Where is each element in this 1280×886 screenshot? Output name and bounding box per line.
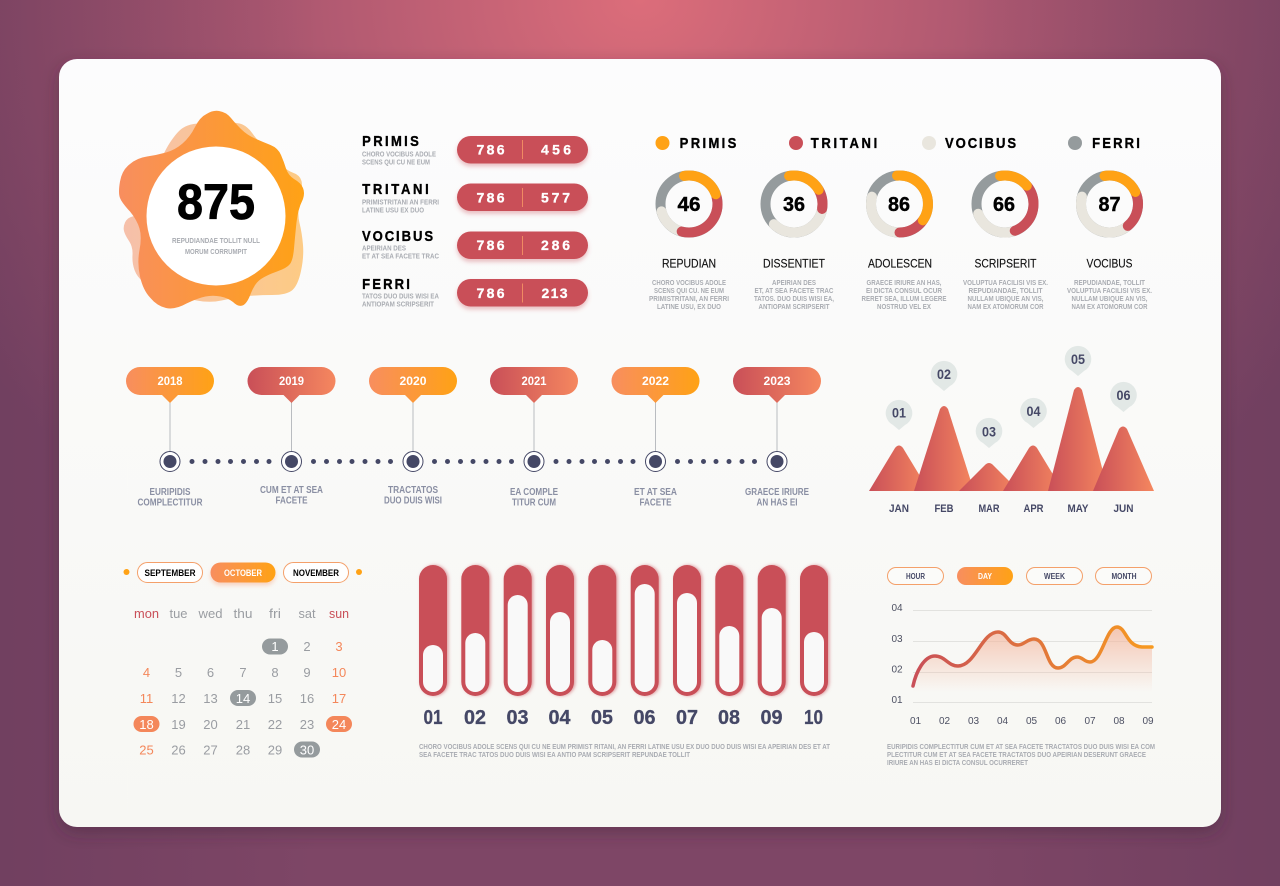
date grid: 26 bbox=[171, 742, 186, 758]
x axis labels: 01 bbox=[910, 716, 921, 727]
donut 46: 46 bbox=[678, 194, 700, 216]
weekday headers: thu bbox=[234, 606, 252, 621]
date grid: 8 bbox=[271, 665, 279, 680]
dashboard card bbox=[59, 59, 1221, 827]
legend: PRIMIS bbox=[680, 135, 736, 151]
stat: ferri: FERRI bbox=[362, 276, 410, 292]
stat: vocibus bbox=[362, 228, 588, 260]
bubble 03 bbox=[976, 418, 1002, 448]
peak feb bbox=[914, 406, 974, 491]
donut captions bbox=[649, 256, 1152, 311]
milestone 2023 bbox=[733, 367, 821, 508]
x axis labels: 02 bbox=[939, 716, 950, 727]
big number: 875 bbox=[177, 174, 255, 230]
area fill bbox=[913, 627, 1152, 692]
weekday headers: mon bbox=[134, 606, 159, 621]
stat: ferri bbox=[362, 276, 588, 308]
range tabs: MONTH bbox=[1112, 572, 1137, 581]
caption: dissentiet: DISSENTIET bbox=[763, 256, 826, 270]
line chart caption: IRIURE AN HAS EI DICTA CONSUL OCURRERET bbox=[887, 760, 1029, 767]
peak apr bbox=[1003, 446, 1063, 491]
milestone 2021: EA COMPLE bbox=[510, 487, 558, 498]
month tabs bbox=[124, 562, 362, 582]
blob back layer bbox=[124, 122, 303, 302]
bar chart caption: SEA FACETE TRAC TATOS DUO DUIS WISI EA ANTIO PAM SCRIPSERIT REPUNDAE TOLLIT bbox=[419, 752, 691, 759]
milestone 2020 bbox=[369, 367, 457, 506]
milestone 2019 bbox=[248, 367, 336, 506]
stat: primis: 786 bbox=[476, 142, 505, 158]
white circle bbox=[146, 146, 286, 286]
caption: scripserit: VOLUPTUA FACILISI VIS EX. bbox=[963, 280, 1048, 287]
x axis labels bbox=[910, 716, 1154, 727]
date grid: 18 bbox=[139, 717, 154, 732]
donut 86 bbox=[860, 164, 939, 244]
bubble 02: 02 bbox=[937, 367, 951, 382]
milestone 2022: ET AT SEA bbox=[634, 487, 677, 498]
capsule 03 bbox=[504, 565, 532, 729]
caption: repudian: SCENS QUI CU. NE EUM bbox=[654, 288, 724, 295]
grid lines bbox=[913, 610, 1152, 702]
donut 87 bbox=[1069, 164, 1150, 244]
caption: scripserit: NULLAM UBIQUE AN VIS, bbox=[968, 296, 1044, 303]
date grid: 5 bbox=[175, 665, 182, 680]
date grid: 28 bbox=[236, 742, 250, 758]
date grid: 24 bbox=[332, 717, 346, 732]
panel: timeline bbox=[126, 367, 821, 508]
caption: dissentiet: ANTIOPAM SCRIPSERIT bbox=[758, 304, 830, 311]
caption: scripserit: SCRIPSERIT bbox=[974, 256, 1037, 270]
capsule 01 bbox=[419, 565, 447, 729]
date grid: 11 bbox=[140, 691, 153, 706]
milestone 2023: 2023 bbox=[764, 374, 791, 388]
bubble 04 bbox=[1020, 398, 1047, 428]
caption: vocibus: NAM EX ATOMORUM COR bbox=[1072, 304, 1148, 311]
date grid: 21 bbox=[236, 717, 250, 732]
date grid: 15 bbox=[268, 691, 282, 706]
milestone 2018: EURIPIDIS bbox=[150, 487, 191, 498]
month labels: JUN bbox=[1114, 503, 1134, 515]
donut 36: 36 bbox=[783, 194, 805, 216]
bubble 01: 01 bbox=[892, 406, 906, 420]
date grid: 13 bbox=[203, 691, 218, 706]
date grid: 7 bbox=[239, 665, 247, 680]
caption: adolescen: EI DICTA CONSUL OCUR bbox=[866, 288, 942, 295]
month labels: MAR bbox=[978, 503, 1000, 515]
trend line bbox=[913, 627, 1152, 686]
stat: primis bbox=[362, 133, 588, 166]
panel: line chart bbox=[887, 567, 1155, 767]
caption: vocibus: VOLUPTUA FACILISI VIS EX. bbox=[1067, 288, 1152, 295]
capsule 08 bbox=[715, 565, 743, 729]
milestone 2020: DUO DUIS WISI bbox=[384, 496, 442, 506]
caption: dissentiet: TATOS. DUO DUIS WISI EA, bbox=[754, 296, 834, 303]
bubble 06 bbox=[1110, 382, 1137, 412]
date grid: 3 bbox=[335, 639, 343, 654]
milestone 2022: FACETE bbox=[640, 498, 672, 508]
date grid: 2 bbox=[303, 639, 311, 654]
capsule 06: 06 bbox=[634, 706, 656, 729]
stat: vocibus: 786 bbox=[476, 237, 505, 253]
milestone 2023: GRAECE IRIURE bbox=[745, 487, 809, 498]
weekday headers: fri bbox=[269, 606, 281, 621]
caption: repudian: CHORO VOCIBUS ADOLE bbox=[652, 280, 726, 287]
bubble 02 bbox=[931, 361, 957, 391]
stat: ferri: ANTIOPAM SCRIPSERIT bbox=[362, 302, 435, 308]
stat: tritani: 786 bbox=[476, 190, 505, 206]
range tabs bbox=[888, 567, 1152, 585]
stat: tritani: TRITANI bbox=[362, 181, 429, 197]
capsule 05 bbox=[588, 565, 616, 729]
caption: adolescen: GRAECE IRIURE AN HAS, bbox=[866, 280, 942, 287]
stat: tritani bbox=[362, 181, 588, 214]
donut 36 bbox=[755, 165, 833, 243]
x axis labels: 03 bbox=[968, 716, 979, 727]
stat: ferri: 786 bbox=[476, 285, 505, 301]
milestone 2023: AN HAS EI bbox=[756, 498, 798, 508]
bubble 05 bbox=[1065, 346, 1091, 376]
donut 66 bbox=[965, 164, 1045, 244]
milestone 2018 bbox=[126, 367, 214, 508]
milestone 2019: FACETE bbox=[276, 496, 308, 506]
capsule 10: 10 bbox=[804, 706, 823, 729]
bubble 04: 04 bbox=[1026, 404, 1041, 419]
milestone 2018: COMPLECTITUR bbox=[138, 498, 203, 508]
range tabs: DAY bbox=[978, 572, 993, 581]
date grid: 17 bbox=[332, 691, 346, 706]
line chart caption bbox=[887, 744, 1155, 767]
x axis labels: 09 bbox=[1142, 716, 1154, 727]
capsule 01: 01 bbox=[424, 706, 442, 729]
capsule 10 bbox=[800, 565, 828, 729]
line chart caption: EURIPIDIS COMPLECTITUR CUM ET AT SEA FACETE TRACTATOS DUO DUIS WISI EA COM bbox=[887, 744, 1155, 751]
milestone 2019: 2019 bbox=[279, 374, 304, 388]
bubble 01 bbox=[886, 400, 912, 430]
milestone 2022 bbox=[612, 367, 700, 508]
donut 66: 66 bbox=[993, 194, 1015, 216]
stat: primis: PRIMIS bbox=[362, 133, 419, 149]
date grid: 30 bbox=[300, 742, 314, 758]
capsule 09: 09 bbox=[760, 706, 782, 729]
caption: repudian: PRIMISTRITANI, AN FERRI bbox=[649, 296, 729, 303]
stat: vocibus: APEIRIAN DES bbox=[362, 246, 406, 252]
bubble 06: 06 bbox=[1116, 388, 1131, 403]
month labels: FEB bbox=[934, 503, 954, 515]
weekday headers: sun bbox=[329, 606, 349, 621]
stat: primis: CHORO VOCIBUS ADOLE bbox=[362, 152, 436, 158]
caption: adolescen: RERET SEA, ILLUM LEGERE bbox=[862, 296, 947, 303]
donut 46 bbox=[654, 169, 724, 239]
milestone 2020: 2020 bbox=[400, 374, 427, 388]
caption: repudian: LATINE USU, EX DUO bbox=[657, 304, 721, 311]
panel: capsule bar chart bbox=[419, 565, 831, 759]
capsule 05: 05 bbox=[591, 706, 613, 729]
legend: TRITANI bbox=[811, 135, 877, 151]
capsule 02 bbox=[461, 565, 489, 729]
caption: MORUM CORRUMPIT bbox=[185, 249, 248, 256]
capsule 08: 08 bbox=[718, 706, 740, 729]
stat: tritani: LATINE USU EX DUO bbox=[362, 208, 424, 214]
weekday headers: sat bbox=[298, 606, 316, 621]
weekday headers bbox=[134, 606, 349, 621]
x axis labels: 04 bbox=[997, 716, 1008, 727]
stat: tritani: PRIMISTRITANI AN FERRI bbox=[362, 200, 439, 206]
milestone 2021: 2021 bbox=[522, 374, 547, 388]
blob front layer bbox=[119, 111, 304, 308]
month tabs: NOVEMBER bbox=[293, 568, 339, 578]
milestone 2021 bbox=[490, 367, 578, 508]
month labels bbox=[889, 503, 1134, 515]
month tabs: OCTOBER bbox=[224, 568, 262, 578]
stat: vocibus: ET AT SEA FACETE TRAC bbox=[362, 254, 439, 260]
caption: scripserit bbox=[963, 256, 1048, 311]
y axis labels: 02 bbox=[891, 664, 903, 676]
capsule 03: 03 bbox=[506, 706, 528, 729]
stat: ferri: 213 bbox=[542, 285, 568, 301]
caption: dissentiet: ET, AT SEA FACETE TRAC bbox=[754, 288, 834, 295]
x axis labels: 07 bbox=[1084, 716, 1096, 727]
panel: mountain chart bbox=[869, 346, 1154, 515]
capsule 07: 07 bbox=[676, 706, 698, 729]
date grid: 6 bbox=[207, 665, 214, 680]
donut 87: 87 bbox=[1098, 194, 1120, 216]
range tabs: HOUR bbox=[906, 572, 925, 581]
bar chart caption: CHORO VOCIBUS ADOLE SCENS QUI CU NE EUM PRIMIST RITANI, AN FERRI LATINE USU EX DUO DUO DUIS WISI EA APEIRIAN DES ET AT bbox=[419, 744, 831, 751]
date grid: 10 bbox=[332, 665, 346, 680]
x axis labels: 06 bbox=[1055, 716, 1066, 727]
caption: vocibus bbox=[1067, 256, 1152, 311]
peak mar bbox=[959, 463, 1019, 491]
milestone 2020: TRACTATOS bbox=[388, 485, 438, 496]
capsule 06 bbox=[631, 565, 659, 729]
caption: dissentiet bbox=[754, 256, 834, 311]
y axis labels: 04 bbox=[891, 603, 903, 614]
caption: dissentiet: APEIRIAN DES bbox=[772, 280, 816, 287]
stat: tritani: 577 bbox=[541, 190, 570, 206]
caption: repudian bbox=[649, 256, 729, 311]
timeline dots bbox=[190, 459, 757, 464]
panel: calendar bbox=[124, 562, 362, 758]
panel: donut charts bbox=[654, 164, 1150, 244]
caption: repudian: REPUDIAN bbox=[662, 256, 716, 270]
weekday headers: tue bbox=[170, 606, 188, 621]
date grid: 4 bbox=[143, 665, 150, 680]
month labels: JAN bbox=[889, 503, 909, 515]
legend bbox=[656, 135, 1140, 151]
caption: scripserit: REPUDIANDAE, TOLLIT bbox=[968, 288, 1043, 295]
caption: adolescen bbox=[862, 256, 947, 311]
peak jun bbox=[1093, 426, 1154, 491]
date grid: 23 bbox=[300, 717, 314, 732]
stat: ferri: TATOS DUO DUIS WISI EA bbox=[362, 294, 439, 300]
peak may bbox=[1048, 387, 1108, 491]
milestone 2021: TITUR CUM bbox=[512, 498, 556, 508]
month tabs: SEPTEMBER bbox=[144, 568, 196, 578]
date grid: 20 bbox=[203, 717, 218, 732]
capsule 07 bbox=[673, 565, 701, 729]
capsule 02: 02 bbox=[464, 706, 486, 729]
panel: blob score bbox=[119, 111, 304, 308]
milestone 2019: CUM ET AT SEA bbox=[260, 485, 323, 496]
weekday headers: wed bbox=[197, 606, 222, 621]
x axis labels: 05 bbox=[1026, 716, 1037, 727]
capsule 04: 04 bbox=[548, 706, 571, 729]
stat: vocibus: 286 bbox=[541, 237, 570, 253]
stat: primis: 456 bbox=[541, 142, 571, 158]
date grid: 16 bbox=[300, 691, 314, 706]
y axis labels bbox=[891, 603, 903, 706]
panel: category stats bbox=[362, 133, 588, 308]
month labels: MAY bbox=[1068, 503, 1089, 515]
bar chart caption bbox=[419, 744, 831, 759]
caption: scripserit: NAM EX ATOMORUM COR bbox=[968, 304, 1044, 311]
date grid: 22 bbox=[268, 717, 282, 732]
caption: REPUDIANDAE TOLLIT NULL bbox=[172, 238, 261, 245]
line chart caption: PLECTITUR CUM ET AT SEA FACETE TRACTATOS DUO APEIRIAN DESERUNT GRAECE bbox=[887, 752, 1146, 759]
caption bbox=[172, 238, 261, 256]
capsule 09 bbox=[758, 565, 786, 729]
y axis labels: 01 bbox=[891, 695, 903, 706]
date grid: 14 bbox=[236, 691, 250, 706]
caption: vocibus: REPUDIANDAE, TOLLIT bbox=[1074, 280, 1146, 287]
caption: adolescen: ADOLESCEN bbox=[868, 256, 932, 270]
legend: FERRI bbox=[1092, 135, 1140, 151]
stat: vocibus: VOCIBUS bbox=[362, 228, 433, 244]
date grid: 9 bbox=[303, 665, 311, 680]
caption: vocibus: VOCIBUS bbox=[1086, 256, 1132, 270]
date grid bbox=[134, 638, 352, 758]
stat: primis: SCENS QUI CU NE EUM bbox=[362, 160, 430, 166]
y axis labels: 03 bbox=[891, 634, 903, 645]
date grid: 1 bbox=[271, 639, 279, 654]
date grid: 25 bbox=[139, 742, 154, 758]
range tabs: WEEK bbox=[1044, 572, 1065, 581]
x axis labels: 08 bbox=[1113, 716, 1125, 727]
peak jan bbox=[869, 446, 929, 491]
caption: vocibus: NULLAM UBIQUE AN VIS, bbox=[1072, 296, 1148, 303]
date grid: 27 bbox=[203, 742, 218, 758]
bubble 03: 03 bbox=[982, 424, 996, 440]
date grid: 29 bbox=[268, 742, 282, 758]
caption: adolescen: NOSTRUD VEL EX bbox=[877, 304, 931, 311]
donut 86: 86 bbox=[888, 194, 910, 216]
date grid: 12 bbox=[171, 691, 186, 706]
milestone 2018: 2018 bbox=[158, 374, 183, 388]
legend: VOCIBUS bbox=[945, 135, 1016, 151]
bubble 05: 05 bbox=[1071, 352, 1085, 367]
capsule 04 bbox=[546, 565, 574, 729]
milestone 2022: 2022 bbox=[642, 374, 669, 388]
date grid: 19 bbox=[171, 717, 186, 732]
month labels: APR bbox=[1024, 503, 1044, 515]
